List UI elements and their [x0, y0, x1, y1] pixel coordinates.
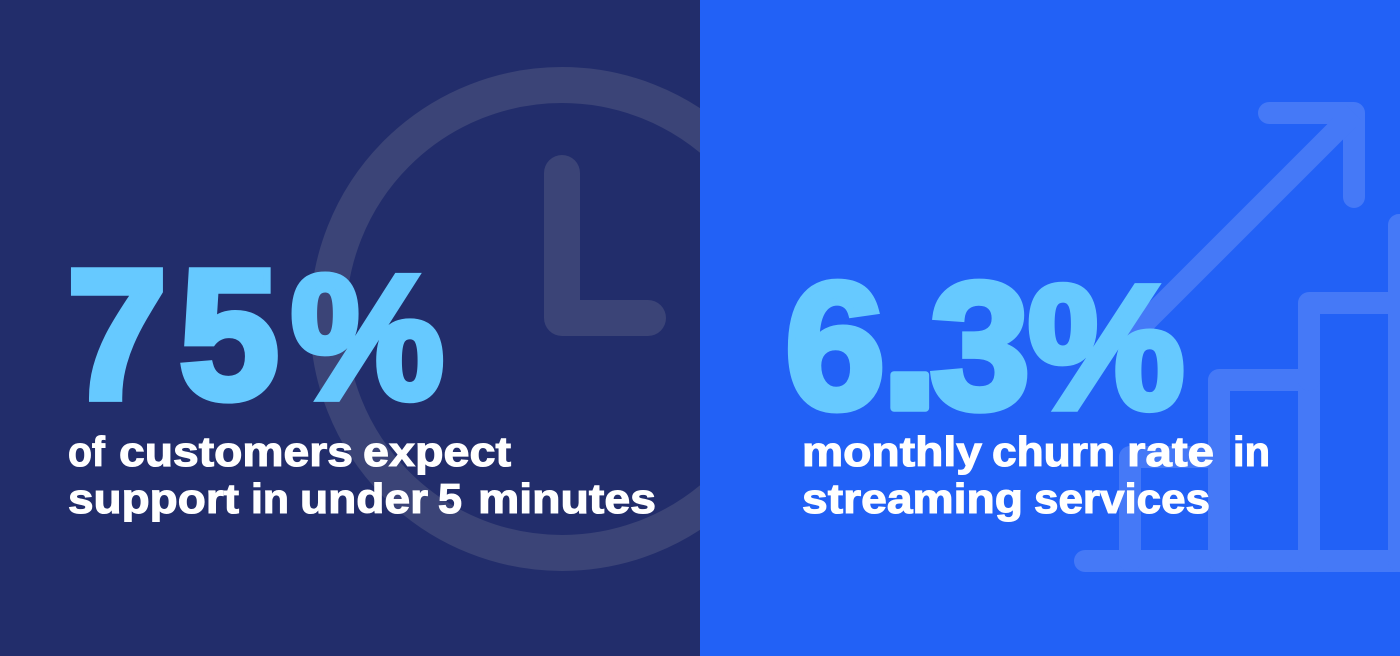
- panel: right streaming churn statistic: [700, 0, 1400, 656]
- icon: clock: [312, 67, 700, 571]
- statistic: 6.3%: .: [879, 208, 941, 456]
- text: churn rate: rate: [1127, 428, 1214, 475]
- text: churn rate: services: [1034, 475, 1210, 522]
- text: support expectation: 5: [438, 475, 462, 522]
- statistic: 75%: [67, 231, 444, 437]
- text: support expectation: [68, 428, 656, 522]
- text: support expectation: in: [251, 475, 289, 522]
- text: churn rate: streaming: [802, 475, 1023, 522]
- icon: rising bar chart with arrow: [1074, 102, 1400, 572]
- statistic: 6.3%: 6: [785, 246, 885, 447]
- text: support expectation: expect: [363, 428, 511, 475]
- text: support expectation: minutes: [478, 475, 656, 522]
- statistic: 75%: %: [291, 238, 444, 435]
- text: support expectation: support: [68, 475, 239, 522]
- text: support expectation: of: [68, 428, 106, 475]
- text: churn rate: churn: [992, 428, 1115, 475]
- text: churn rate: monthly: [802, 428, 983, 475]
- statistic: 75%: 75: [67, 231, 279, 437]
- text: churn rate: in: [1233, 428, 1270, 475]
- statistic: 6.3%: [785, 208, 1184, 456]
- text: churn rate: [802, 428, 1270, 522]
- statistic: 6.3%: 3: [930, 246, 1030, 447]
- panel: left customer support statistic: [0, 0, 700, 656]
- text: support expectation: under: [300, 475, 428, 522]
- statistic: 6.3%: %: [1028, 250, 1184, 446]
- text: support expectation: customers: [119, 428, 353, 475]
